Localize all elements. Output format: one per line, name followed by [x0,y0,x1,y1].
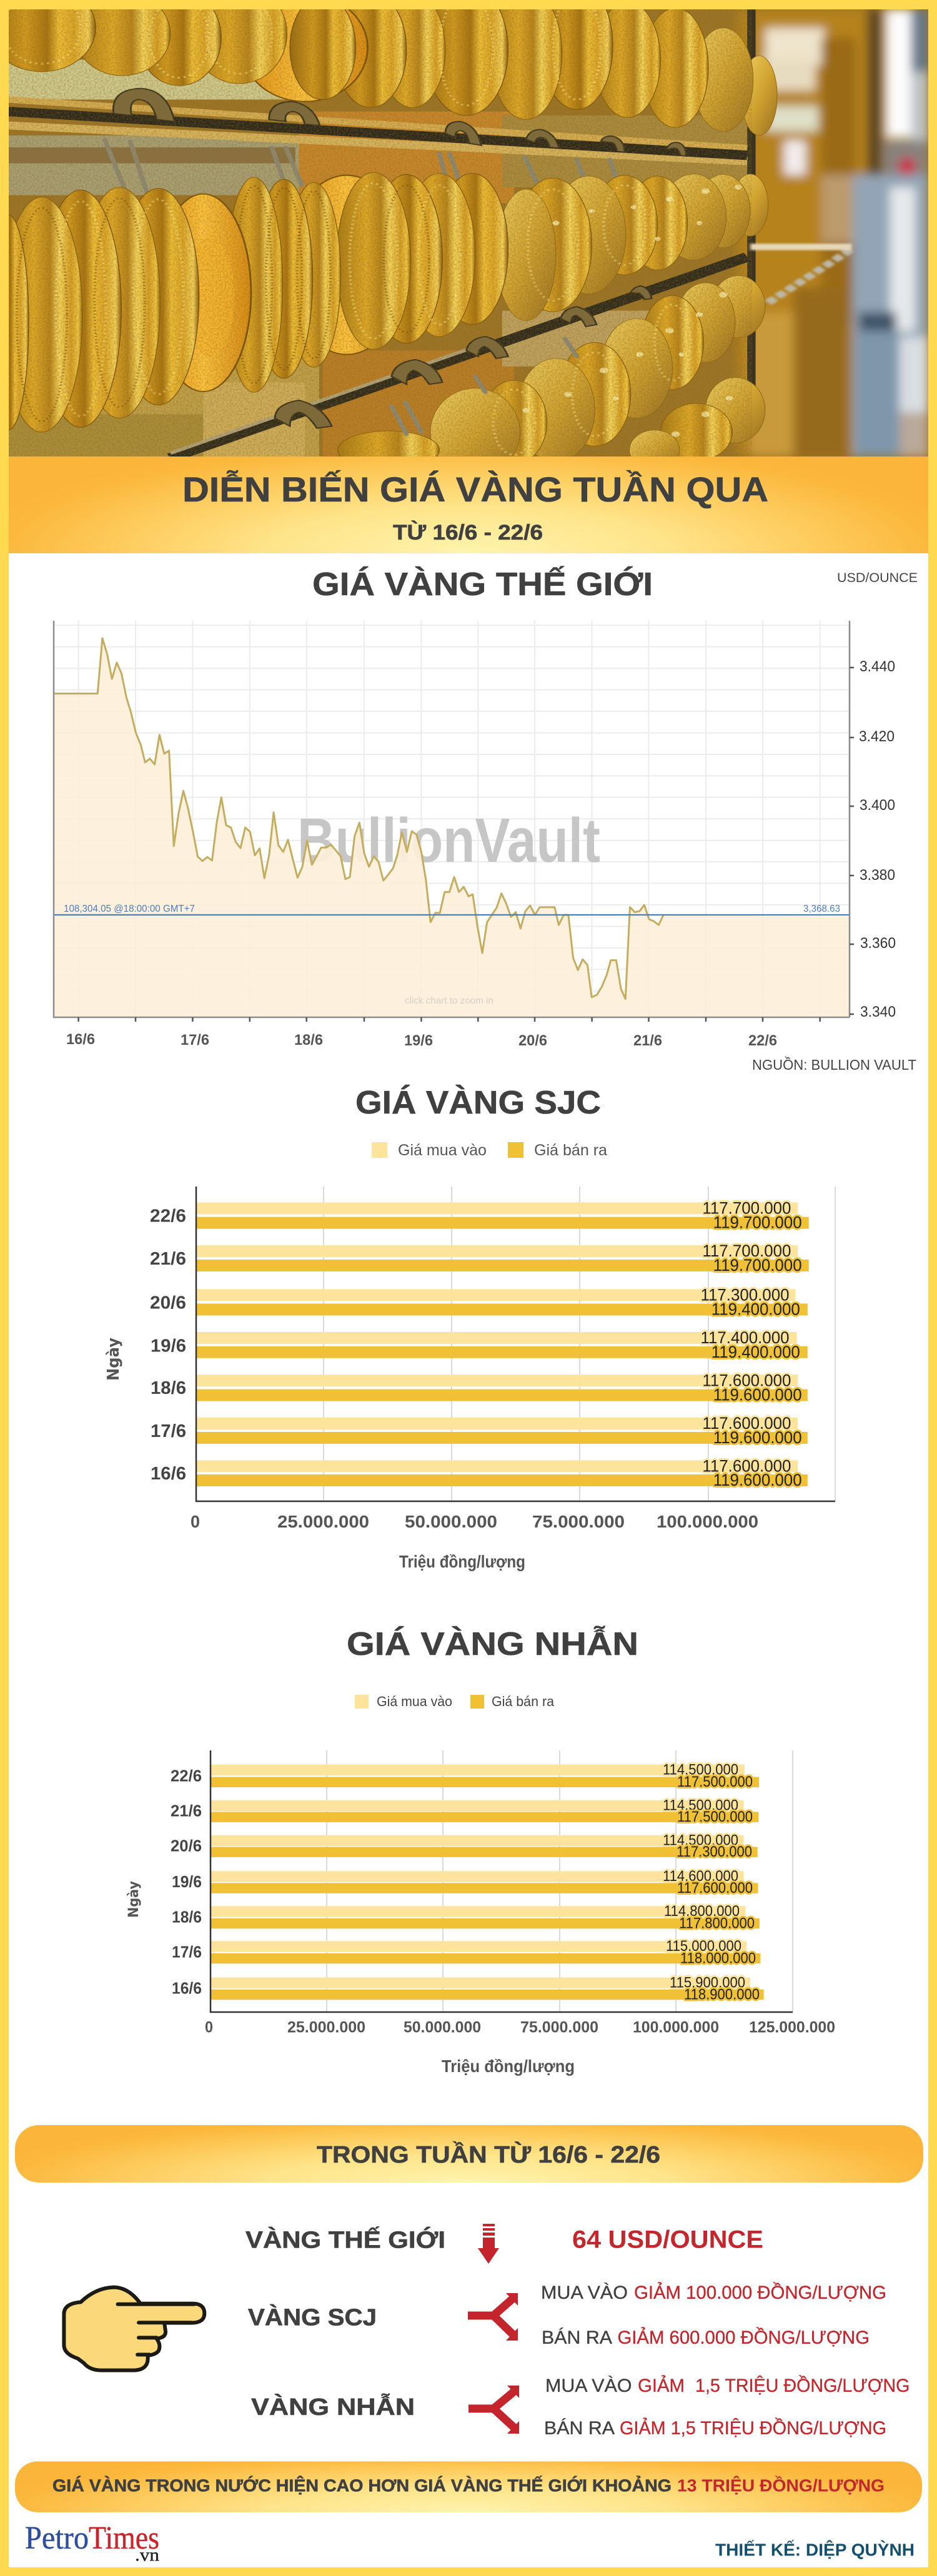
vertical rack post [747,9,756,408]
ring gold value labels [663,1762,760,2003]
SJC day labels: 17/6 [151,1421,186,1441]
ring gold y axis title: Ngày [126,1881,142,1918]
upper rod with clips [8,99,747,148]
SJC value labels: 117.600.000 [702,1414,791,1433]
buy bars [196,1202,798,1472]
SJC day labels: 18/6 [151,1378,186,1398]
y axis labels: 3.340 [860,1004,896,1020]
SJC value labels: 119.700.000 [713,1213,802,1232]
x axis labels [66,1031,777,1049]
x axis labels: 20/6 [518,1032,547,1049]
SJC axes [196,1187,835,1501]
date range: TỪ 16/6 - 22/6 [393,521,543,545]
heading: world gold price: GIÁ VÀNG THẾ GIỚI [312,566,653,603]
SJC value labels: 117.300.000 [701,1285,790,1304]
ring gold day labels: 16/6 [172,1978,202,1997]
ring gold x axis labels: 0 [205,2018,213,2036]
icon: red fork arrow [468,2386,519,2434]
buy bars [211,1764,750,1988]
icon: red down arrow [478,2224,499,2264]
ring gold value labels: 114.800.000 [664,1903,740,1920]
SJC day labels: 19/6 [151,1336,186,1356]
y axis labels: 3.420 [859,728,895,745]
ring gold label: VÀNG NHẪN [251,2393,415,2421]
SJC x axis labels [191,1512,758,1531]
ring gold legend: Giá mua vào [377,1694,452,1709]
SJC x axis title: Triệu đồng/lượng [399,1552,525,1571]
ring gold buy change: GIẢM [638,2375,685,2396]
icon: pointing hand [64,2287,204,2371]
ring gold value labels: 117.600.000 [677,1880,753,1897]
x axis labels: 16/6 [66,1031,95,1048]
source note: NGUỒN: BULLION VAULT [752,1056,916,1073]
ring gold legend: Giá bán ra [492,1694,555,1709]
ring gold day labels: 21/6 [171,1802,202,1820]
SJC value labels: 119.600.000 [713,1386,802,1404]
SJC value labels: 119.600.000 [713,1428,802,1447]
SJC x axis labels: 75.000.000 [532,1512,625,1531]
current value: 3,368.63 [803,904,840,914]
ring gold value labels: 118.900.000 [684,1986,760,2003]
ring gold bar chart [126,1750,835,2076]
ring gold day labels: 17/6 [172,1942,202,1961]
ring gold x axis labels: 125.000.000 [749,2018,835,2036]
SJC value labels: 117.600.000 [702,1371,791,1389]
SJC x axis labels: 25.000.000 [277,1512,369,1531]
ring gold x axis labels [205,2018,835,2036]
designer credit: THIẾT KẾ: DIỆP QUỲNH [715,2540,915,2560]
row: world gold [245,2224,763,2264]
axes and ticks [54,621,850,1017]
SJC buy change: MUA VÀO [541,2282,628,2303]
ring gold day labels: 18/6 [172,1907,202,1926]
conclusion highlight: 13 TRIỆU ĐỒNG/LƯỢNG [677,2475,885,2495]
metal grain overlay [9,9,752,456]
lower row bangles [718,275,766,338]
heading: SJC gold: GIÁ VÀNG SJC [355,1085,601,1121]
ring gold sell change: BÁN RA [544,2418,615,2439]
ring gold buy change [545,2375,910,2396]
middle row bangles, far to near [738,174,768,236]
logo: PetroTimes: Times [89,2520,159,2556]
unit label: USD/OUNCE [837,571,918,585]
SJC value labels: 119.600.000 [713,1471,802,1489]
hooks [104,139,126,191]
world gold line chart [54,621,896,1049]
ring gold value labels: 115.900.000 [670,1975,745,1991]
y axis labels: 3.400 [860,797,895,814]
hero photo: gold bangles [0,0,928,476]
ring gold axes [211,1750,793,2012]
x axis labels: 21/6 [633,1032,662,1049]
SJC legend: Giá mua vào [398,1142,487,1159]
zoom hint: click chart to zoom in [405,995,493,1006]
row: SJC summary [248,2282,886,2348]
ring gold value labels: 114.500.000 [663,1832,738,1848]
SJC x axis labels: 50.000.000 [405,1512,497,1531]
SJC day labels: 22/6 [150,1206,186,1226]
sell bars [196,1217,809,1486]
x axis labels: 22/6 [748,1032,777,1049]
ring gold x axis labels: 75.000.000 [520,2018,598,2036]
ring gold day labels: 20/6 [171,1837,202,1855]
SJC value labels: 117.600.000 [702,1456,791,1475]
ring gold buy change: 1,5 TRIỆU ĐỒNG/LƯỢNG [695,2375,910,2396]
y axis labels: 3.380 [860,867,895,884]
SJC value labels: 117.700.000 [702,1241,791,1260]
x axis labels: 18/6 [294,1032,323,1049]
ring gold day labels [171,1767,202,1997]
ring gold buy change: MUA VÀO [545,2376,632,2396]
SJC value labels: 117.700.000 [702,1198,791,1217]
SJC value labels [701,1198,802,1489]
sell bars [211,1777,764,2000]
summary header band [15,2125,923,2183]
world gold label: VÀNG THẾ GIỚI [245,2226,445,2253]
ring gold x axis labels: 25.000.000 [287,2018,365,2036]
row: ring gold summary [251,2375,910,2439]
SJC sell change: BÁN RA [542,2327,612,2348]
SJC buy change: GIẢM 100.000 ĐỒNG/LƯỢNG [634,2282,886,2303]
ring gold x axis labels: 100.000.000 [633,2018,719,2036]
main title: DIỄN BIẾN GIÁ VÀNG TUẦN QUA [182,470,768,509]
ring gold value labels: 114.500.000 [663,1762,738,1779]
SJC day labels: 21/6 [150,1249,186,1269]
reference labels: 108,304.05 @18:00:00 GMT+7 [64,904,195,914]
SJC y axis title: Ngày [104,1338,123,1381]
SJC value labels: 119.400.000 [711,1300,800,1319]
reference line [54,914,850,915]
ring gold value labels: 117.500.000 [677,1809,753,1825]
SJC buy change [541,2282,886,2303]
logo: PetroTimes: .vn [135,2546,159,2565]
logo: PetroTimes: Petro [25,2520,89,2556]
y axis labels [859,658,896,1020]
blurred shop background right [737,9,928,456]
y axis labels: 3.440 [860,658,895,675]
world gold change: 64 USD/OUNCE [572,2226,763,2253]
area under line [54,638,850,1018]
SJC value labels: 119.700.000 [713,1256,802,1275]
ring gold x axis labels: 50.000.000 [404,2018,481,2036]
SJC day labels: 16/6 [151,1464,186,1484]
ring gold legend [355,1694,555,1709]
ring gold value labels: 114.500.000 [663,1797,738,1814]
conclusion band [15,2462,922,2512]
summary header text: TRONG TUẦN TỪ 16/6 - 22/6 [317,2141,660,2168]
background behind bangles [8,60,307,99]
x axis labels: 19/6 [404,1032,433,1049]
icon: red fork arrow [468,2293,518,2341]
SJC bar chart [104,1187,835,1571]
ring gold x axis title: Triệu đồng/lượng [442,2056,575,2076]
logo: PetroTimes [25,2520,159,2565]
price line [54,638,663,999]
y axis labels: 3.360 [860,935,896,952]
sparkles [522,185,742,437]
ring gold day labels: 19/6 [172,1872,202,1891]
SJC value labels: 117.400.000 [701,1328,790,1347]
top row bangles [741,56,777,136]
ring gold value labels: 118.000.000 [680,1950,756,1967]
SJC label: VÀNG SCJ [248,2303,377,2331]
ring gold value labels: 117.800.000 [679,1915,755,1932]
ring gold value labels: 117.500.000 [677,1774,753,1790]
ring gold value labels: 117.300.000 [677,1843,752,1860]
SJC legend: Giá bán ra [534,1142,607,1159]
watermark: BullionVault [297,806,600,876]
SJC x axis labels: 100.000.000 [657,1512,758,1531]
x axis labels: 17/6 [181,1032,209,1049]
ring gold value labels: 114.600.000 [663,1868,738,1885]
ring gold value labels: 115.000.000 [666,1938,741,1955]
title band [9,456,928,553]
ring gold sell change: GIẢM 1,5 TRIỆU ĐỒNG/LƯỢNG [620,2417,886,2439]
ring gold day labels: 22/6 [171,1767,202,1785]
conclusion text: GIÁ VÀNG TRONG NƯỚC HIỆN CAO HƠN GIÁ VÀNG THẾ GIỚI KHOẢNG [52,2475,672,2495]
SJC legend [372,1142,607,1159]
lower rod with clips [171,257,747,458]
far silver rod [750,247,852,303]
heading: ring gold: GIÁ VÀNG NHẪN [347,1626,638,1662]
SJC day labels [150,1206,186,1484]
SJC day labels: 20/6 [150,1293,186,1313]
SJC x axis labels: 0 [191,1512,200,1531]
SJC value labels: 119.400.000 [711,1343,800,1361]
SJC sell change: GIẢM 600.000 ĐỒNG/LƯỢNG [617,2327,870,2348]
